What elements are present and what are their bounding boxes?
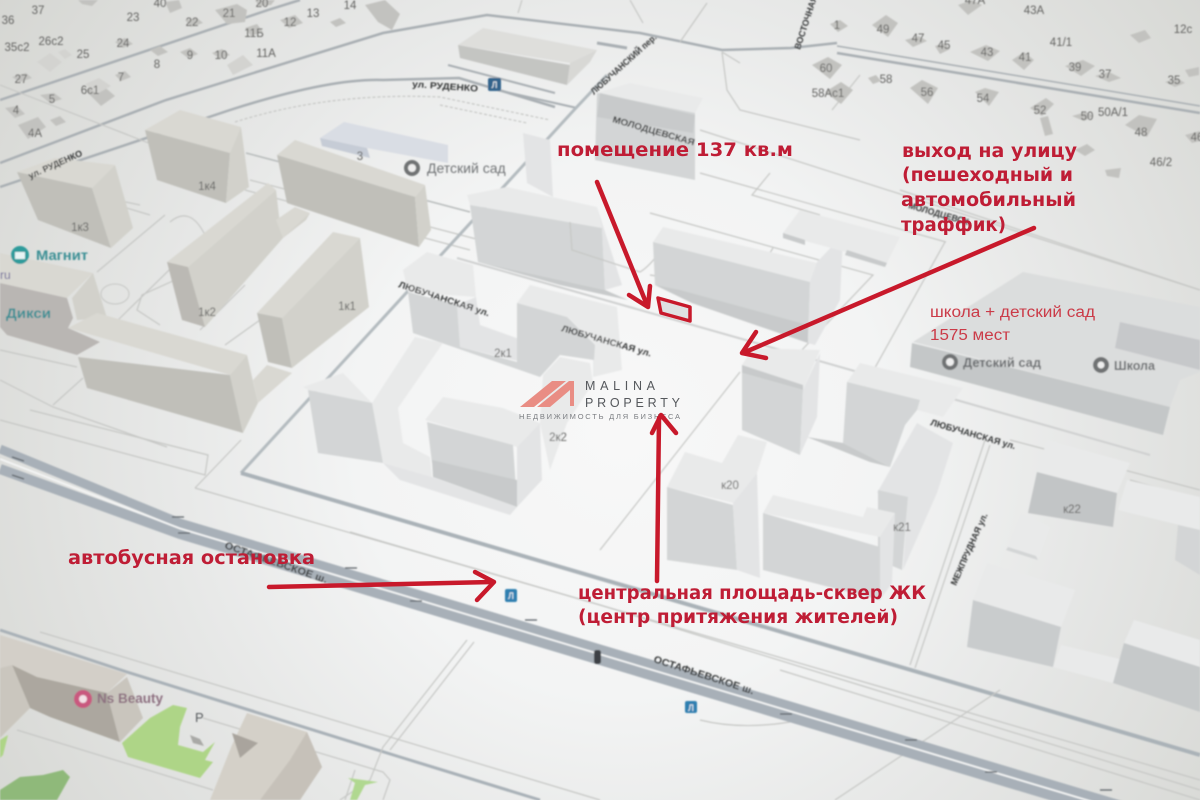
callout: exit to the street: (пешеходный и [902,165,1073,186]
building: north block [467,187,668,300]
building: Magnit and Dixi block [0,253,292,433]
house numbers: top-left: 9 [187,50,193,62]
house numbers: top-right: 58Ас1 [812,88,844,100]
POI: Magnit store [11,246,88,264]
building 1k3 [17,158,133,248]
house numbers: top-right: 50А/1 [1098,107,1128,119]
building: block with the premises [653,227,843,345]
building k21: к21 [893,522,911,534]
callout: exit to the street: автомобильный [901,190,1076,211]
marker: premises location [658,298,690,321]
icon: second bus stop on highway [685,701,697,713]
house numbers: top-left: 8 [154,59,160,71]
green areas [0,705,378,800]
parking label: P [195,710,204,725]
building k22 [1006,440,1200,575]
arrow: to central square [652,415,676,581]
POI: partial label: ru [0,268,11,282]
street labels: ул. РУДЕНКО [27,148,84,181]
house numbers: top-right: 46/2 [1150,157,1172,169]
building: kindergarten no. 3 [320,122,448,163]
building 1k3: 1к3 [71,222,89,234]
house numbers: top-left: 13 [307,8,319,20]
building 2k2 [303,337,567,515]
building k21 [763,423,953,600]
house numbers: top-right: 35 [1168,75,1180,87]
house numbers: top-left: 6с1 [81,85,99,97]
building: Molodtsevskaya block [523,83,703,197]
building 1k1 [257,232,369,368]
house numbers: top-left: 7 [118,72,124,84]
icon: second bus stop on highway: Л [688,703,694,713]
house numbers: top-left: 37 [32,5,44,17]
building: north-east annex [783,210,900,267]
houses: top-right neighbourhood [812,0,1200,178]
house numbers: top-left: 26с2 [39,36,63,48]
street labels: ЛЮБУЧАНСКИЙ пер. [588,31,659,96]
callout: exit to the street: траффик) [901,215,1006,236]
house numbers: top-right: 48 [1135,127,1147,139]
building: east tower [742,348,820,455]
house numbers: top-left: 36 [2,15,14,27]
POI: Ns Beauty: Ns Beauty [97,691,163,706]
callout: exit to the street: выход на улицу [902,141,1077,162]
building 1k2: 1к2 [198,307,216,319]
street labels: ЛЮБУЧАНСКАЯ ул. [929,417,1017,451]
house numbers: top-left: 5 [49,94,55,106]
watermark: Malina Property logo [519,379,681,421]
callout: school and kindergarten capacity: 1575 мест [930,327,1010,344]
POI: Ns Beauty [74,690,163,708]
street labels [27,0,1017,697]
street labels: ОСТАФЬЕВСКОЕ ш. [223,540,329,586]
icon: bus stop on Rudenko street: Л [492,80,498,90]
watermark: Malina Property logo: НЕДВИЖИМОСТЬ ДЛЯ БИЗНЕСА [519,412,680,421]
building: school and kindergarten [910,272,1200,435]
building k20 [667,435,767,578]
house numbers: top-right: 52 [1034,105,1046,117]
house numbers: top-left: 21 [223,8,235,20]
arrow: to bus stop [269,572,494,600]
house numbers: top-right: 56 [921,87,933,99]
callout: premises 137 sq.m: помещение 137 кв.м [557,140,793,161]
street labels: МОЛОДЦЕВСКАЯ [611,114,696,147]
house numbers: top-left: 25 [77,49,89,61]
building 2k2: 2к2 [549,432,567,444]
building 1k2 [167,183,310,327]
icon: traffic light [594,650,601,664]
building 2k1 [403,252,622,470]
building: kindergarten no. 3: 3 [357,151,363,163]
house numbers: top-right: 43А [1024,5,1045,17]
callout: central square: центральная площадь-сквер ЖК [578,583,926,604]
house numbers: top-left: 27 [15,74,27,86]
house numbers: top-right: 54 [977,93,990,105]
street labels: ЛЮБУЧАНСКАЯ ул. [560,323,653,359]
building 2k1: 2к1 [494,348,512,360]
house numbers: top-left: 23 [127,12,139,24]
watermark: Malina Property logo: PROPERTY [585,396,681,410]
building: long block beside kindergarten [277,140,431,247]
house numbers: top-left: 11А [256,48,276,60]
building 1k4: 1к4 [198,181,217,193]
house numbers: top-right: 41/1 [1050,37,1072,49]
POI: kindergarten east: Детский сад [963,355,1042,370]
building 1k4 [145,110,249,203]
callout: central square: (центр притяжения жителей) [578,607,898,628]
house numbers: top-right: 43 [981,47,993,59]
house numbers: top-right: 49 [877,24,889,36]
POI: school [1093,357,1156,373]
house numbers: top-left: 4 [13,105,20,117]
building k20: к20 [721,480,739,492]
building 1k1: 1к1 [338,301,356,313]
street labels: ОСТАФЬЕВСКОЕ ш. [652,654,756,697]
POI: kindergarten: Детский сад [427,160,506,176]
POI: school: Школа [1114,358,1156,373]
callout: exit to the street [901,141,1077,236]
icon: bus stop on highway [505,589,517,602]
building k22: к22 [1063,504,1081,516]
house numbers: top-right: 12с [1174,24,1193,36]
building: north of k21 [807,363,963,467]
house numbers: top-right: 1 [834,20,840,32]
houses: top-left neighbourhood [5,0,400,139]
house numbers: top-left [2,0,357,140]
buildings: south-west corner [0,635,322,800]
street labels: ул. РУДЕНКО [412,79,478,94]
callout: bus stop: автобусная остановка [68,548,315,569]
house numbers: top-right: 47 [912,33,924,45]
house numbers: top-left: 4А [28,128,42,140]
house numbers: top-right: 50 [1081,111,1093,123]
street labels: ЛЮБУЧАНСКАЯ ул. [397,279,491,318]
callout: central square [578,583,926,628]
house numbers: top-left: 12 [284,17,296,29]
house numbers: top-right: 60 [820,63,832,75]
street labels: МОЛОДЦЕВСК [907,200,970,227]
house numbers: top-left: 35с2 [5,42,29,54]
house numbers: top-left: 10 [215,50,227,62]
house numbers: top-left: 22 [186,17,198,29]
road: Ostafyevskoe highway [0,449,1200,800]
arrow: to street exit [742,228,1034,358]
callout: school and kindergarten capacity: школа + детский сад [930,304,1095,321]
street labels: МЕЖПРУДНАЯ ул. [949,511,990,587]
house numbers: top-right: 37 [1099,69,1111,81]
icon: bus stop on highway: Л [508,591,514,601]
house numbers: top-left: 14 [344,0,357,12]
house numbers: top-right: 41 [1019,52,1031,64]
icon: bus stop on Rudenko street [488,78,501,91]
house numbers: top-right: 45 [938,40,950,52]
watermark: Malina Property logo: MALINA [585,379,656,393]
building: top block by Rudenko street [458,28,597,85]
house numbers: top-left: 24 [117,38,130,50]
POI: Dixi store: Дикси [6,305,51,321]
house numbers: top-left: 11Б [244,28,264,40]
callout: school and kindergarten capacity [930,304,1095,344]
house numbers: top-right: 39 [1069,62,1081,74]
arrow: to premises [597,182,650,307]
house numbers: top-right [812,0,1200,169]
house numbers: top-right: 58 [880,74,892,86]
buildings: south-east corner [967,563,1200,712]
POI: Magnit store: Магнит [36,247,88,263]
